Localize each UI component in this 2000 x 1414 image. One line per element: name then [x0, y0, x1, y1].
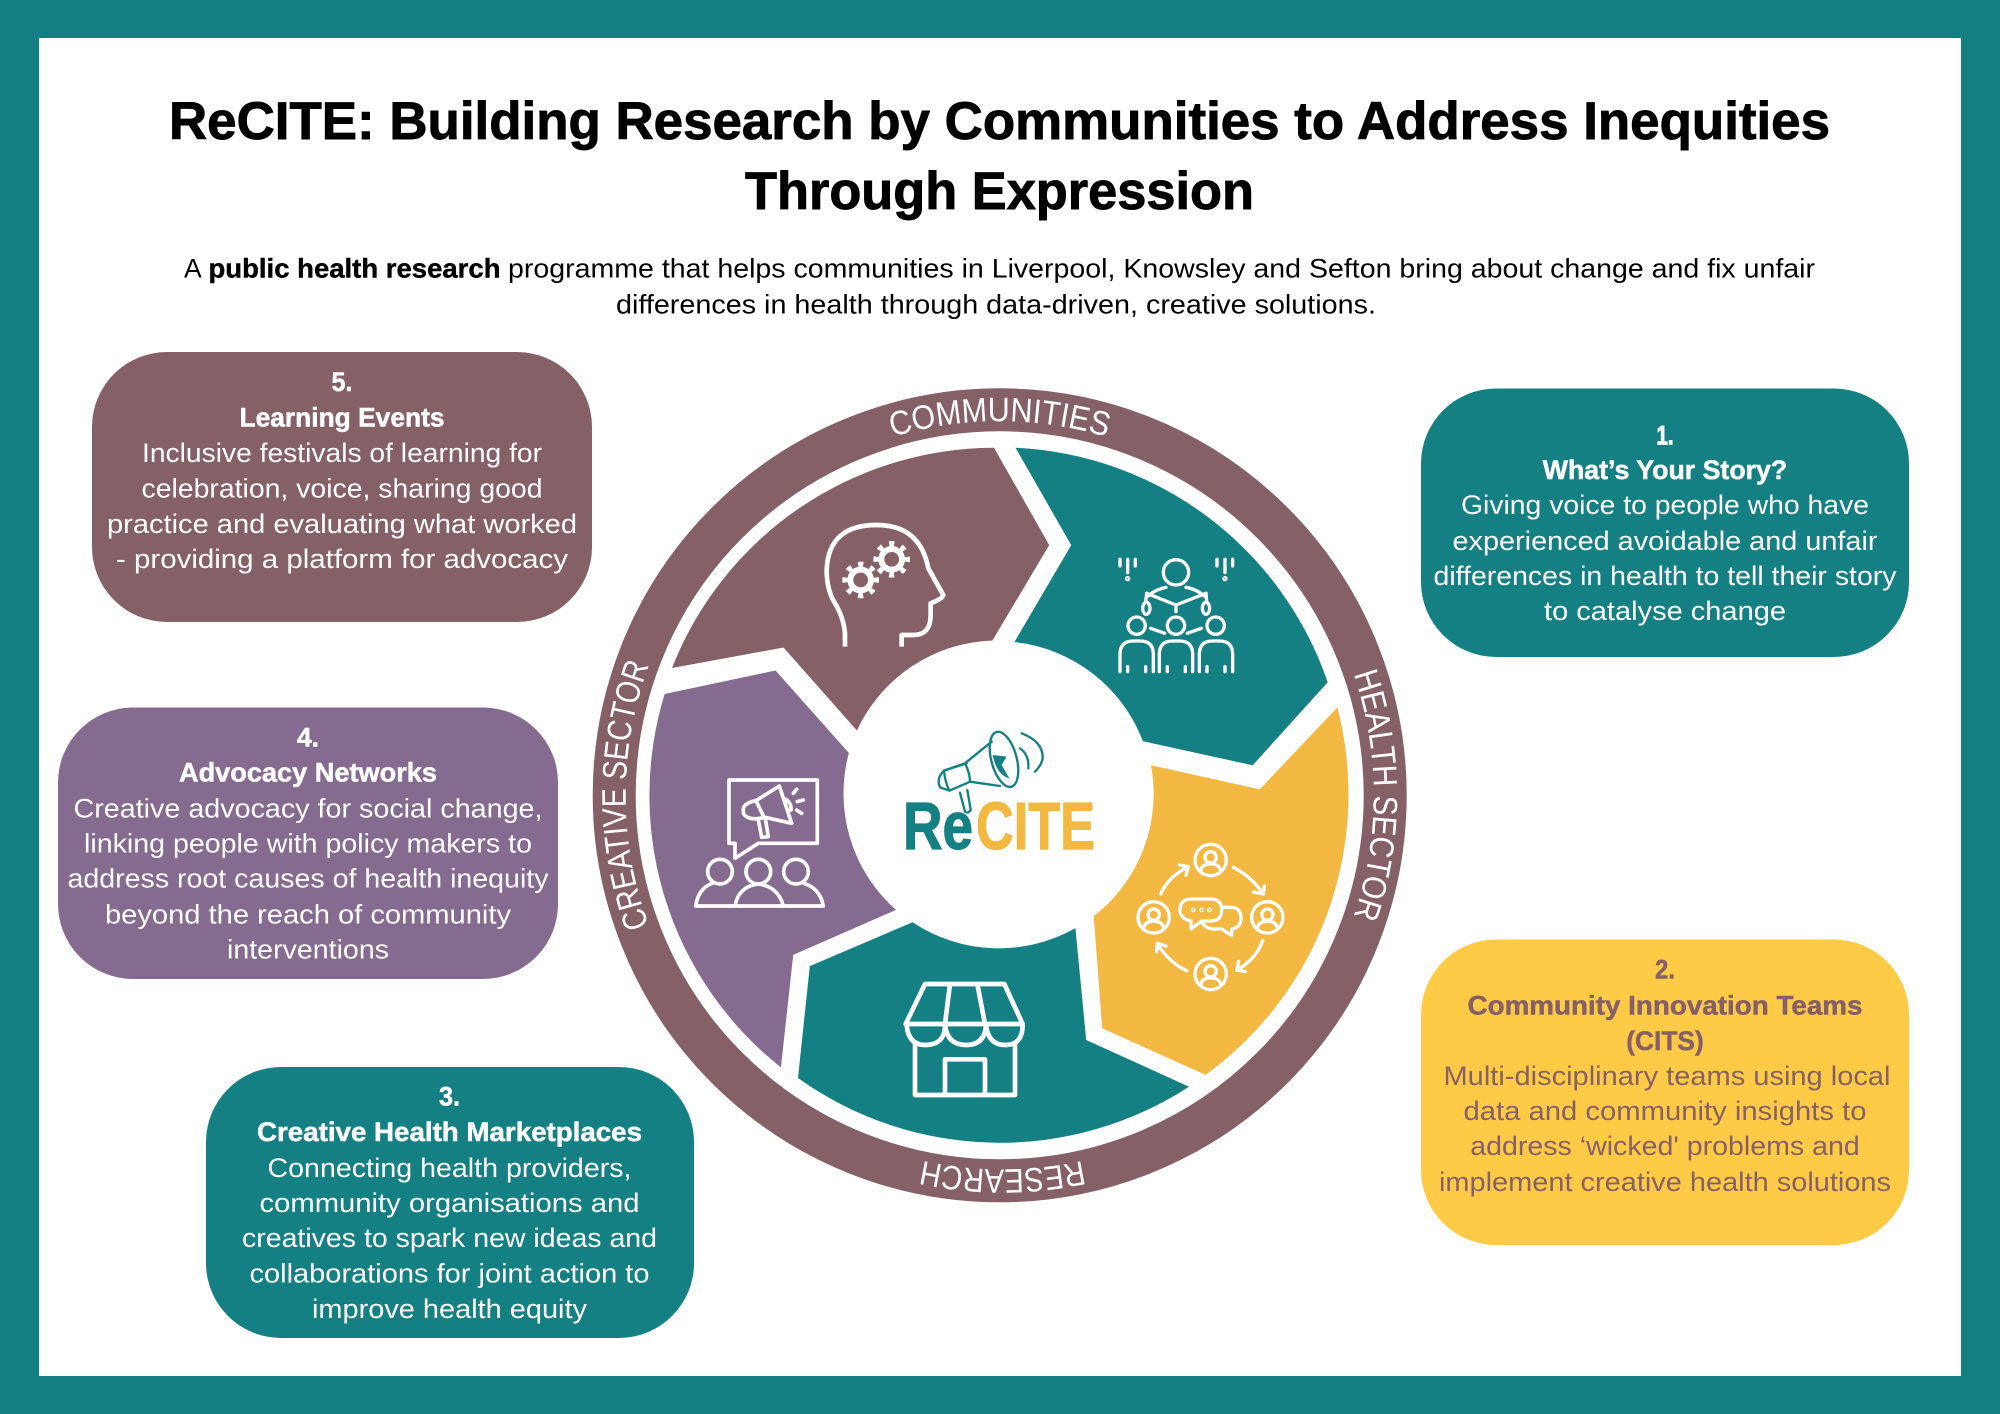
icon: megaphone speech bubble and audience [696, 780, 823, 906]
ring labels: RESEARCH [920, 1161, 1084, 1193]
ring labels: COMMUNITIES [890, 398, 1110, 435]
panel: 1 What's Your Story [1421, 388, 1909, 657]
text: What's Your Story description [1434, 490, 1897, 626]
text: Community Innovation Teams description: data and community insights to [1464, 1096, 1866, 1126]
text: Advocacy Networks description: interventions [227, 934, 389, 964]
text: Learning Events description: Inclusive festivals of learning for [142, 438, 542, 468]
heading: 5 Learning Events: 5. [332, 367, 352, 397]
heading: 2 Community Innovation Teams: Community Innovation Teams [1468, 990, 1862, 1020]
ring labels: CREATIVE SECTOR [602, 661, 648, 930]
text: Advocacy Networks description: address root causes of health inequity [68, 864, 549, 894]
text: Community Innovation Teams description: address ‘wicked' problems and [1470, 1131, 1860, 1161]
text: Marketplaces description: collaborations for joint action to [250, 1258, 650, 1288]
text: Marketplaces description: improve health equity [312, 1294, 588, 1324]
subtitle: differences in health through data-driven, creative solutions. [616, 290, 1376, 320]
segment: marketplaces [798, 922, 1189, 1143]
heading: 1 What's Your Story [1543, 420, 1787, 485]
heading: 3 Creative Health Marketplaces [257, 1082, 642, 1147]
text: Community Innovation Teams description [1439, 1061, 1891, 1197]
segment: learning events [672, 448, 1049, 730]
icon: head with gears [827, 525, 943, 647]
panel: 4 Advocacy Networks [58, 708, 558, 979]
text: Marketplaces description: creatives to spark new ideas and [242, 1223, 657, 1253]
icon: people in a cycle with chat [1138, 844, 1283, 990]
heading: 1 What's Your Story: What’s Your Story? [1543, 455, 1787, 485]
text: Learning Events description: celebration, voice, sharing good [142, 473, 542, 503]
text: Marketplaces description [242, 1153, 657, 1324]
text: Learning Events description: - providing a platform for advocacy [116, 544, 569, 574]
text: Learning Events description [107, 438, 577, 574]
outer ring [614, 410, 1385, 1181]
subtitle: public health research [208, 254, 500, 284]
subtitle: A [184, 254, 202, 284]
logo wordmark: CITE [976, 789, 1095, 864]
segment: community innovation teams [1094, 707, 1348, 1075]
text: What's Your Story description: differences in health to tell their story [1434, 561, 1897, 591]
text: Community Innovation Teams description: Multi-disciplinary teams using local [1444, 1061, 1890, 1091]
ring labels [602, 398, 1398, 1193]
heading: 4 Advocacy Networks: 4. [297, 722, 319, 752]
logo: ReCITE [903, 729, 1095, 864]
subtitle: programme that helps communities in Liverpool, Knowsley and Sefton bring about change and fix unfair [508, 254, 1815, 284]
segment: what's your story [1014, 448, 1328, 765]
heading: 2 Community Innovation Teams [1468, 954, 1862, 1056]
logo wordmark [903, 789, 1095, 864]
panel: 3 Creative Health Marketplaces [206, 1067, 694, 1338]
icon: group with leader [1120, 559, 1233, 672]
wheel diagram [592, 388, 1407, 1202]
panel: 5 Learning Events [92, 352, 592, 622]
text: Learning Events description: practice and evaluating what worked [107, 509, 577, 539]
heading: 5 Learning Events: Learning Events [240, 402, 444, 432]
segment: advocacy networks [649, 670, 896, 1067]
icon: shop front [906, 984, 1023, 1095]
heading: 5 Learning Events [240, 367, 444, 432]
logo wordmark: Re [903, 789, 973, 864]
title: Through Expression [745, 162, 1254, 221]
heading: 4 Advocacy Networks [179, 722, 437, 788]
panel: 2 Community Innovation Teams [1421, 940, 1909, 1245]
subtitle [184, 254, 1815, 320]
text: Marketplaces description: Connecting health providers, [268, 1153, 632, 1183]
ring labels: HEALTH SECTOR [1354, 669, 1398, 920]
text: What's Your Story description: experienced avoidable and unfair [1452, 526, 1878, 556]
heading: 2 Community Innovation Teams: 2. [1655, 954, 1675, 984]
text: Advocacy Networks description: Creative advocacy for social change, [74, 794, 542, 824]
text: Marketplaces description: community organisations and [260, 1188, 640, 1218]
heading: 3 Creative Health Marketplaces: Creative Health Marketplaces [257, 1117, 642, 1147]
text: Advocacy Networks description [68, 794, 549, 964]
text: Community Innovation Teams description: implement creative health solutions [1439, 1167, 1891, 1197]
heading: 1 What's Your Story: 1. [1656, 420, 1674, 450]
text: Advocacy Networks description: linking people with policy makers to [84, 828, 532, 858]
text: What's Your Story description: to catalyse change [1544, 596, 1786, 626]
text: Advocacy Networks description: beyond the reach of community [105, 900, 512, 930]
heading: 3 Creative Health Marketplaces: 3. [439, 1082, 460, 1112]
text: What's Your Story description: Giving voice to people who have [1461, 490, 1869, 520]
icon: logo megaphone [939, 729, 1043, 813]
title [169, 92, 1830, 221]
heading: 2 Community Innovation Teams: (CITS) [1626, 1026, 1704, 1056]
title: ReCITE: Building Research by Communities to Address Inequities [169, 92, 1830, 151]
heading: 4 Advocacy Networks: Advocacy Networks [179, 758, 437, 788]
